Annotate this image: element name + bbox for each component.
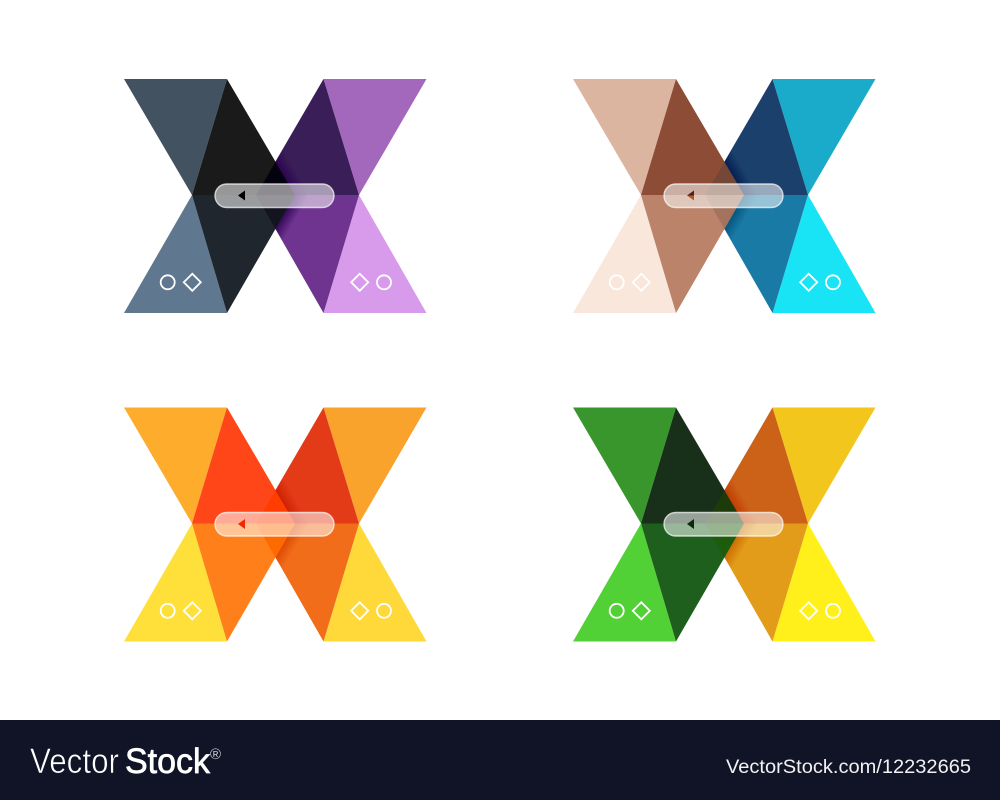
overlap shadow — [276, 141, 308, 250]
left triangles — [573, 79, 676, 313]
icon: right circle — [826, 275, 840, 289]
panel: slate and purple X — [124, 79, 426, 313]
icon: left diamond — [184, 274, 201, 291]
right triangles — [324, 79, 426, 313]
pill label — [664, 184, 783, 208]
icon: arrow — [687, 519, 694, 529]
pill label — [215, 512, 334, 536]
icon: right diamond — [800, 602, 817, 619]
icon: right circle — [826, 604, 840, 618]
icon: right circle — [377, 275, 391, 289]
left diamond — [192, 79, 295, 313]
logo wordmark — [30, 742, 221, 781]
overlap — [256, 490, 295, 558]
pill label — [664, 512, 783, 536]
icon: left diamond — [633, 274, 650, 291]
left diamond — [641, 408, 744, 642]
icon: left circle — [161, 604, 175, 618]
icon: right diamond — [351, 602, 368, 619]
right triangles — [772, 79, 876, 313]
icon: arrow — [238, 190, 245, 200]
left triangles — [573, 408, 676, 642]
overlap — [705, 162, 744, 229]
logo wordmark: Vector — [30, 742, 119, 781]
left triangles — [124, 79, 227, 313]
icon: arrow — [687, 190, 694, 200]
logo wordmark: Stock — [125, 742, 210, 781]
image id text: VectorStock.com/12232665 — [726, 757, 971, 778]
right diamond — [705, 408, 808, 642]
right diamond — [256, 408, 359, 642]
overlap — [705, 490, 744, 558]
right triangles — [772, 408, 876, 642]
panel: tan and cyan X — [573, 79, 876, 313]
panel: orange and yellow X — [124, 408, 426, 642]
footer bar — [0, 720, 1000, 800]
left diamond — [192, 408, 295, 642]
icon: right diamond — [351, 274, 368, 291]
icon: left diamond — [184, 602, 201, 619]
icon: right circle — [377, 604, 391, 618]
icon: arrow — [238, 519, 245, 529]
icon: left circle — [161, 275, 175, 289]
icon: left circle — [610, 275, 624, 289]
pill label — [215, 184, 334, 208]
icon: left circle — [610, 604, 624, 618]
icon: left diamond — [633, 602, 650, 619]
left diamond — [641, 79, 744, 313]
left triangles — [124, 408, 227, 642]
overlap shadow — [724, 470, 757, 578]
overlap — [256, 162, 295, 229]
icon: right diamond — [800, 274, 817, 291]
panel: green and yellow X — [573, 408, 876, 642]
overlap shadow — [724, 141, 757, 250]
overlap shadow — [276, 470, 308, 578]
logo wordmark: ® — [210, 746, 221, 763]
right triangles — [324, 408, 426, 642]
right diamond — [705, 79, 808, 313]
right diamond — [256, 79, 359, 313]
